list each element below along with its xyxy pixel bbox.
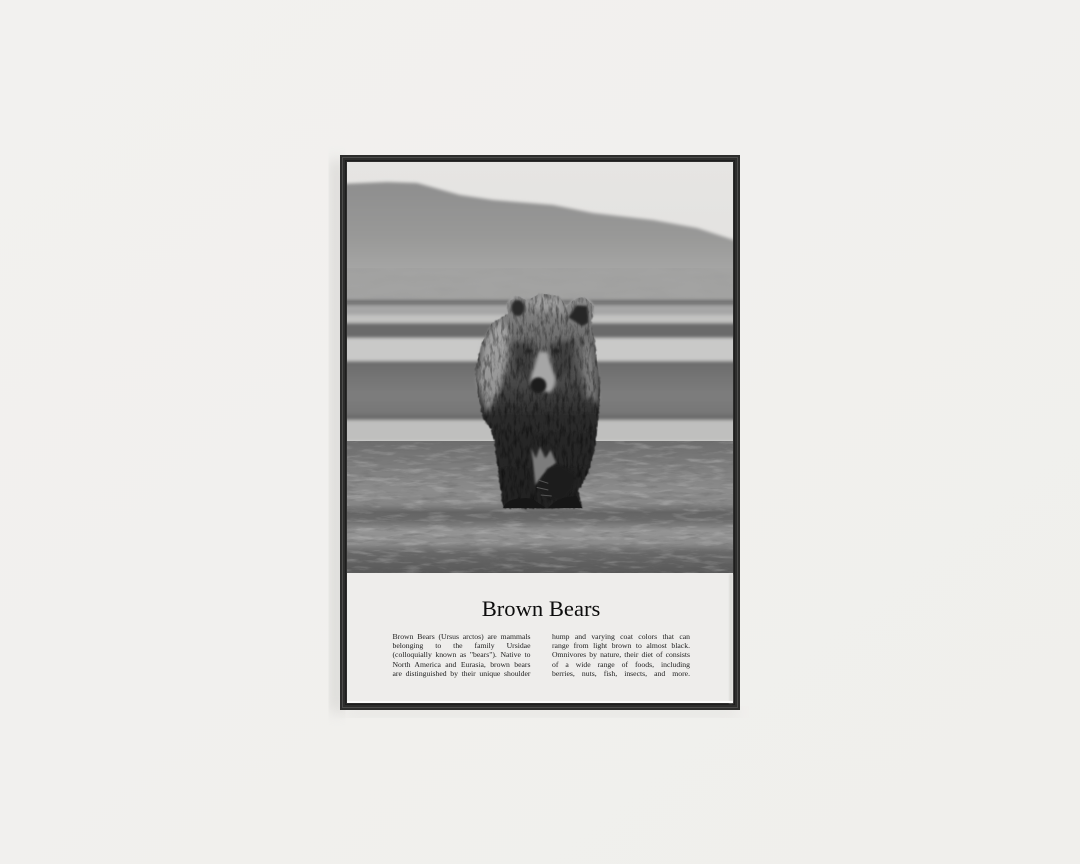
dark eye sockets bbox=[512, 340, 575, 378]
gap between legs bbox=[531, 447, 556, 485]
bear bbox=[470, 290, 603, 510]
text column: left: are distinguished by their unique shoulder bbox=[392, 669, 530, 678]
snout bbox=[531, 351, 556, 393]
hazy far shore bbox=[347, 272, 733, 302]
text column: right: berries, nuts, fish, insects, and more. bbox=[552, 669, 690, 678]
text column: right: Omnivores by nature, their diet of consists bbox=[552, 650, 690, 659]
text column: left: (colloquially known as "bears"). Native to bbox=[392, 650, 530, 659]
text column: left: belonging to the family Ursidae bbox=[392, 641, 530, 650]
bear body bbox=[475, 293, 600, 509]
text column: left: North America and Eurasia, brown bears bbox=[392, 660, 530, 669]
photograph: bear on tidal flat bbox=[340, 162, 740, 573]
title: Brown Bears bbox=[482, 596, 600, 621]
text column: left bbox=[392, 632, 530, 678]
sky bbox=[347, 163, 733, 238]
tidal flat bands bbox=[340, 300, 740, 442]
light flank fur bbox=[477, 319, 509, 413]
front feet bbox=[503, 496, 582, 508]
nose bbox=[530, 377, 546, 393]
text column: right: hump and varying coat colors that can bbox=[552, 632, 690, 640]
right ear bbox=[568, 305, 589, 326]
fur texture bbox=[470, 290, 603, 510]
text column: right bbox=[552, 632, 690, 678]
distant mountain bbox=[340, 182, 740, 275]
right eye bbox=[553, 349, 560, 353]
right shoulder fur bbox=[582, 337, 599, 403]
text column: left: Brown Bears (Ursus arctos) are mammals bbox=[392, 632, 530, 640]
right ear rim bbox=[568, 298, 594, 305]
poster frame bbox=[340, 155, 740, 710]
left ear rim bbox=[507, 298, 513, 303]
left ear bbox=[511, 300, 525, 316]
text column: right: of a wide range of foods, including bbox=[552, 660, 690, 669]
raised paw bbox=[538, 464, 572, 486]
left eye bbox=[525, 349, 532, 353]
frame shadow on wall bbox=[331, 160, 737, 716]
wet sand foreground bbox=[347, 441, 733, 573]
paw claws bbox=[537, 480, 552, 496]
paper shading on poster edges bbox=[347, 574, 733, 703]
text column: right: range from light brown to almost black. bbox=[552, 641, 690, 650]
crown of the head bbox=[522, 296, 565, 313]
